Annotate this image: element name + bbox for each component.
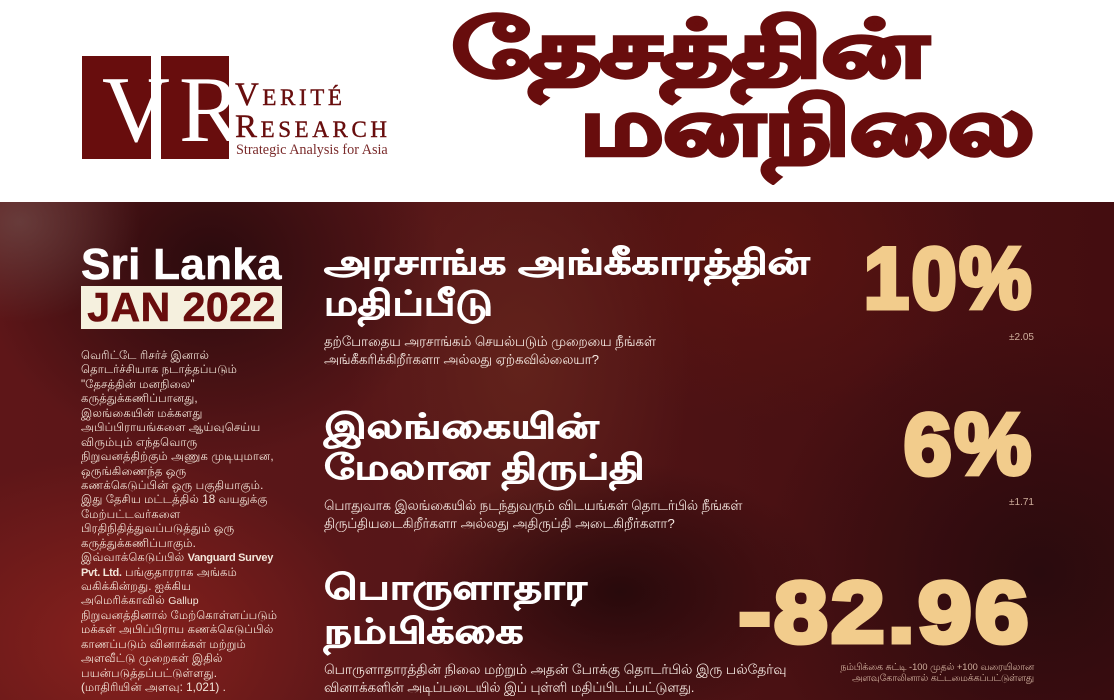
- intro text: தொடர்ச்சியாக நடாத்தப்படும்: [81, 363, 237, 376]
- metric 2 heading: [323, 408, 645, 492]
- metric 1 heading: மதிப்பீடு: [324, 285, 493, 323]
- logo wordmark: [235, 77, 391, 145]
- metric 1 value: 10%: [864, 231, 1034, 327]
- title: [452, 5, 1034, 185]
- intro text: கணக்கெடுப்பின் ஒரு பகுதியாகும்.: [81, 479, 263, 492]
- intro text: பயன்படுத்தப்பட்டுள்ளது.: [81, 667, 217, 680]
- intro text: (மாதிரியின் அளவு: 1,021) .: [81, 681, 226, 694]
- metric 2 heading: இலங்கையின்: [324, 408, 599, 446]
- metric 2 question: திருப்தியடைகிறீர்களா அல்லது அதிருப்தி அடைகிறீர்களா?: [324, 516, 675, 530]
- intro text: மக்கள் அபிப்பிராய கணக்கெடுப்பில்: [81, 623, 273, 636]
- intro text: ஒருங்கிணைந்த ஒரு: [81, 464, 186, 478]
- background panel: [0, 202, 1114, 700]
- intro text: Pvt. Ltd. பங்குதாரராக அங்கம்: [81, 566, 237, 579]
- intro text: இது தேசிய மட்டத்தில் 18 வயதுக்கு: [81, 493, 268, 506]
- metric 3 question: [324, 662, 786, 696]
- logo: [82, 56, 391, 162]
- intro text: வெரிட்டே ரிசர்ச் இனால்: [81, 349, 209, 362]
- logo squares: [82, 56, 229, 159]
- metric 3 heading: [323, 569, 588, 656]
- metric 3 heading: நம்பிக்கை: [324, 613, 524, 651]
- metric 1 heading: [324, 244, 810, 328]
- metric 1 question: [324, 334, 656, 368]
- logo tagline: Strategic Analysis for Asia: [236, 142, 388, 158]
- metric 3 note: நம்பிக்கை சுட்டி -100 முதல் +100 வரையிலான: [840, 662, 1034, 672]
- intro text: வகிக்கின்றது. ஐக்கிய: [81, 580, 191, 593]
- metric 3 note: அளவுகோலினால் கட்டமைக்கப்பட்டுள்ளது: [852, 672, 1034, 682]
- intro text: விரும்பும் எந்தவொரு: [81, 436, 197, 449]
- intro text: நிறுவனத்தினால் மேற்கொள்ளப்படும்: [81, 609, 277, 622]
- title: மனநிலை: [580, 83, 1034, 171]
- intro text: இவ்வாக்கெடுப்பில் Vanguard Survey: [81, 551, 273, 564]
- metric 3 question: வினாக்களின் அடிப்படையில் இப் புள்ளி மதிப்பிடப்பட்டுளது.: [324, 680, 694, 694]
- intro text: மேற்பட்டவர்களை: [81, 508, 180, 521]
- intro text: அளவீட்டு முறைகள் இதில்: [81, 652, 223, 665]
- intro text: காணப்படும் வினாக்கள் மற்றும்: [81, 638, 246, 651]
- metric 3 question: பொருளாதாரத்தின் நிலை மற்றும் அதன் போக்கு தொடர்பில் இரு பல்தேர்வு: [324, 662, 786, 677]
- intro text: இலங்கையின் மக்களது: [81, 407, 202, 420]
- metric 1 heading: அரசாங்க அங்கீகாரத்தின்: [324, 244, 810, 282]
- title: தேசத்தின்: [452, 5, 928, 93]
- logo wordmark: Verité: [235, 77, 346, 113]
- country heading: Sri Lanka: [81, 240, 282, 289]
- metric 2 question: [324, 498, 742, 532]
- metric 3 value: -82.96: [739, 565, 1032, 661]
- metric 2 question: பொதுவாக இலங்கையில் நடந்துவரும் விடயங்கள் தொடர்பில் நீங்கள்: [324, 498, 742, 513]
- intro text: கருத்துக்கணிப்பானது,: [81, 392, 198, 405]
- metric 1 question: தற்போதைய அரசாங்கம் செயல்படும் முறையை நீங்கள்: [324, 334, 656, 349]
- metric 1 question: அங்கீகரிக்கிறீர்களா அல்லது ஏற்கவில்லையா?: [324, 352, 599, 366]
- intro text: நிறுவனத்திற்கும் அணுக முடியுமான,: [81, 450, 274, 463]
- intro text: [81, 349, 277, 694]
- metric 3 note: [840, 662, 1034, 684]
- logo letter V: V: [102, 58, 170, 162]
- intro text: அமெரிக்காவில் Gallup: [81, 594, 199, 607]
- metric 2 margin: ±1.71: [1009, 497, 1034, 508]
- metric 1 margin: ±2.05: [1009, 332, 1034, 343]
- metric 3 heading: பொருளாதார: [324, 569, 587, 607]
- intro text: பிரதிநிதித்துவப்படுத்தும் ஒரு: [81, 522, 234, 535]
- metric 2 heading: மேலான திருப்தி: [324, 449, 645, 487]
- logo wordmark: Research: [235, 109, 391, 145]
- metric 2 value: 6%: [904, 397, 1034, 493]
- date badge: JAN 2022: [87, 284, 276, 330]
- logo letter R: R: [179, 58, 242, 162]
- intro text: "தேசத்தின் மனநிலை": [81, 378, 195, 391]
- intro text: அபிப்பிராயங்களை ஆய்வுசெய்ய: [81, 421, 260, 434]
- intro text: கருத்துக்கணிப்பாகும்.: [81, 537, 196, 550]
